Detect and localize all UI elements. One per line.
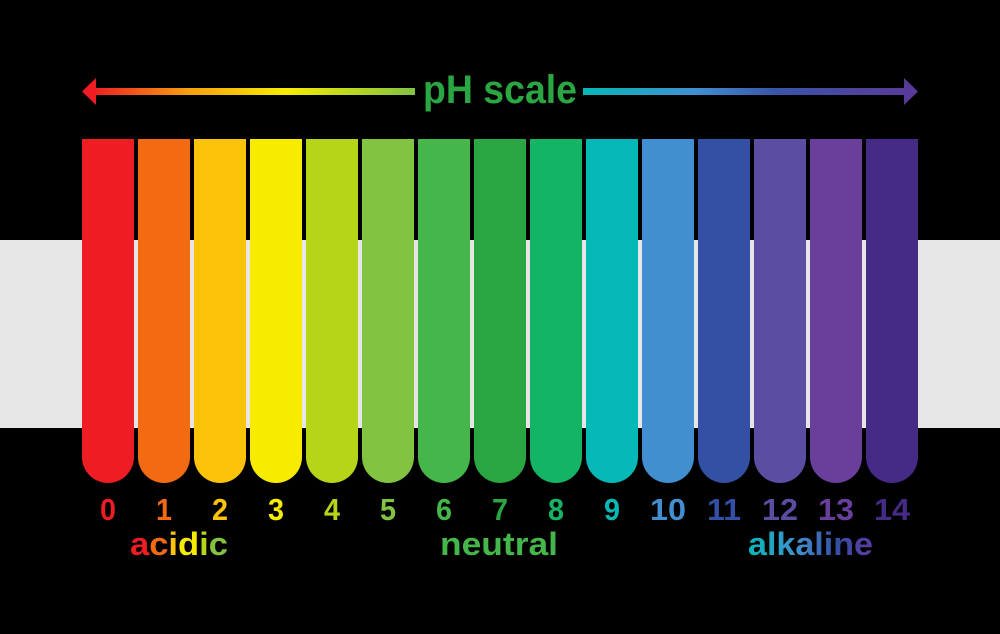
numbers: 3 — [268, 492, 284, 527]
label: neutral: neutral — [440, 526, 558, 562]
numbers: 1 — [156, 492, 172, 527]
numbers: 0 — [100, 492, 116, 527]
title: pH scale — [423, 68, 577, 112]
arrow: right alkaline — [583, 78, 918, 105]
numbers: 13 — [818, 492, 854, 527]
numbers: 6 — [436, 492, 452, 527]
numbers: 2 — [212, 492, 228, 527]
numbers: 10 — [650, 492, 686, 527]
numbers — [100, 492, 911, 527]
numbers: 7 — [492, 492, 508, 527]
label: alkaline: alkaline — [748, 526, 873, 562]
tubes — [82, 139, 918, 483]
numbers: 9 — [604, 492, 620, 527]
numbers: 14 — [874, 492, 911, 527]
numbers: 12 — [762, 492, 798, 527]
background band — [0, 240, 1000, 428]
label: acidic: acidic — [130, 526, 228, 562]
numbers: 11 — [707, 492, 741, 527]
numbers: 4 — [324, 492, 341, 527]
numbers: 8 — [548, 492, 564, 527]
numbers: 5 — [380, 492, 396, 527]
arrow: left acidic — [82, 78, 415, 105]
